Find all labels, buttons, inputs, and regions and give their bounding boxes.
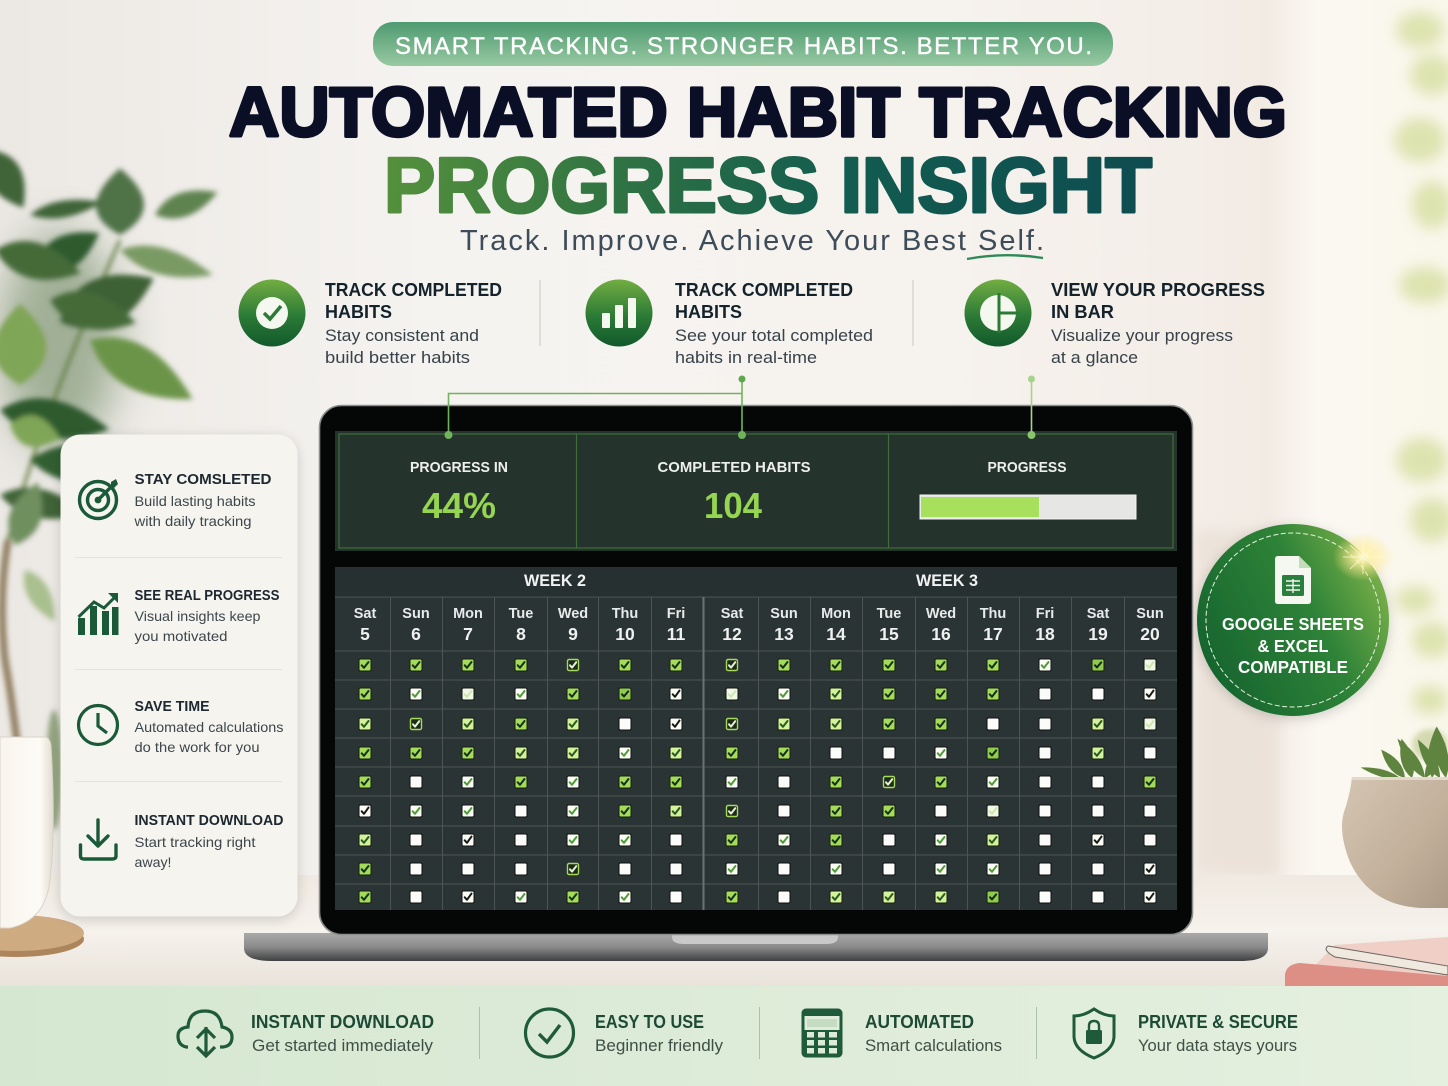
day headers: Wed [558,606,588,622]
footer: instant download: Get started immediately [252,1036,434,1055]
title: AUTOMATED HABIT TRACKING [229,73,1287,151]
day headers: 20 [1140,624,1160,644]
feature: view progress: IN BAR [1051,302,1114,322]
icon: calculator [803,1010,841,1056]
footer: automated: AUTOMATED [865,1012,974,1032]
stat: progress bar [920,459,1136,519]
benefit: stay [80,472,272,529]
feature: view progress [964,280,1265,367]
stat: completed habits [658,459,810,526]
feature: track completed habits: build better habits [325,348,470,367]
subtitle: Track. Improve. Achieve Your Best Self. [460,225,1044,257]
feature: view progress: VIEW YOUR PROGRESS [1051,280,1265,300]
laptop [244,406,1268,961]
feature: total completed: habits in real-time [675,348,817,367]
day headers: Sun [1136,606,1164,622]
day headers: Sat [354,606,376,622]
day headers: 9 [568,624,578,644]
feature: total completed: See your total completed [675,326,873,345]
benefit: download [80,813,284,870]
table surface [0,875,1448,986]
plant canopy shadow [0,230,120,450]
benefit: stay: STAY COMSLETED [134,472,272,488]
icon: clock [78,706,118,744]
icon: cloud download [178,1011,232,1056]
feature: track completed habits: HABITS [325,302,392,322]
day headers: Thu [980,606,1006,622]
icon: download [80,820,116,859]
window foliage [1394,12,1448,714]
laptop base [244,933,1268,961]
day headers: 7 [463,624,473,644]
day headers: 12 [722,624,742,644]
icon: check circle [526,1009,574,1057]
day headers: Wed [926,606,956,622]
stat: progress bar: PROGRESS [988,459,1066,476]
feature: view progress: at a glance [1051,348,1138,367]
footer: private and secure: PRIVATE & SECURE [1138,1012,1298,1032]
notebook [1285,937,1448,986]
stat: completed habits: COMPLETED HABITS [658,459,810,476]
day headers: 14 [826,624,846,644]
icon: sheet document [1275,556,1311,604]
footer: easy to use [526,1009,723,1057]
feature: total completed: TRACK COMPLETED [675,280,853,300]
day headers: 13 [774,624,794,644]
benefit: download: away! [134,854,172,870]
laptop lid [320,406,1192,934]
stat: progress percent [410,459,508,526]
feature: track completed habits: TRACK COMPLETED [325,280,502,300]
feature: view progress: Visualize your progress [1051,326,1233,345]
benefit: progress: Visual insights keep [134,608,261,624]
day headers: 10 [615,624,635,644]
icon: pie chart [964,280,1032,346]
coaster [0,915,84,957]
potted plant [1342,726,1448,908]
feature: track completed habits [238,280,502,367]
icon: target [80,479,118,518]
stats panel [335,431,1177,551]
day headers: Sat [1087,606,1109,622]
badge: google sheets and excel compatible: & EXCEL [1258,636,1329,656]
footer: automated [803,1010,1002,1056]
icon: bar chart [586,280,652,346]
day headers: 17 [983,624,1003,644]
day headers: Fri [1036,606,1054,622]
stat: completed habits: 104 [704,485,762,526]
day headers: 19 [1088,624,1108,644]
benefit: stay: with daily tracking [133,513,252,529]
day headers: Sun [402,606,430,622]
week grid [335,567,1177,910]
title: PROGRESS INSIGHT [384,141,1152,229]
footer band [0,986,1448,1086]
day headers: Tue [509,606,533,622]
benefit: progress: SEE REAL PROGRESS [134,588,280,604]
feature: total completed [586,280,873,367]
day headers: Fri [667,606,685,622]
day headers: 11 [667,624,686,644]
left plant [0,142,222,830]
footer: instant download [178,1011,434,1056]
day headers: Mon [821,606,851,622]
benefit: progress [78,588,280,644]
icon: check circle [238,280,306,346]
tagline pill [373,22,1113,66]
stat: progress percent: PROGRESS IN [410,459,508,476]
day headers: 5 [360,624,370,644]
week headings: WEEK 2 [524,571,586,590]
week headings: WEEK 3 [916,571,978,590]
day headers: 6 [411,624,421,644]
title [229,73,1287,229]
footer: private and secure [1074,1009,1298,1058]
checkboxes [359,659,1156,903]
feature: track completed habits: Stay consistent and [325,326,479,345]
day headers: Mon [453,606,483,622]
day headers: 16 [931,624,951,644]
benefit: stay: Build lasting habits [134,493,256,509]
day headers: Sat [721,606,743,622]
footer: private and secure: Your data stays yours [1138,1036,1297,1055]
connector lines [444,376,1036,439]
tagline pill: SMART TRACKING. STRONGER HABITS. BETTER YOU. [395,33,1092,60]
benefit: time: do the work for you [134,739,260,755]
grid lines [335,597,1177,910]
icon: shield lock [1074,1009,1114,1058]
icon: growth chart [78,593,118,635]
badge: google sheets and excel compatible: COMPATIBLE [1238,657,1348,677]
footer: instant download: INSTANT DOWNLOAD [251,1012,434,1032]
day headers: Thu [612,606,638,622]
badge: google sheets and excel compatible [1197,524,1395,716]
badge: google sheets and excel compatible: GOOGLE SHEETS [1222,614,1364,634]
day headers [354,606,1164,644]
benefit: time [78,699,284,755]
day headers: Tue [877,606,901,622]
day headers: 18 [1035,624,1055,644]
footer: automated: Smart calculations [865,1036,1002,1055]
feature: total completed: HABITS [675,302,742,322]
benefit: download: INSTANT DOWNLOAD [134,813,284,829]
footer: easy to use: Beginner friendly [595,1036,723,1055]
benefit: progress: you motivated [134,628,228,644]
benefit: download: Start tracking right [134,834,256,850]
day headers: 8 [516,624,526,644]
benefit: time: Automated calculations [134,719,284,735]
benefit: time: SAVE TIME [134,699,210,715]
mug [0,737,53,928]
stat: progress percent: 44% [422,485,496,526]
day headers: 15 [879,624,899,644]
day headers: Sun [770,606,798,622]
panel: benefits [60,434,298,916]
week headings [524,571,978,590]
footer: easy to use: EASY TO USE [595,1012,704,1032]
